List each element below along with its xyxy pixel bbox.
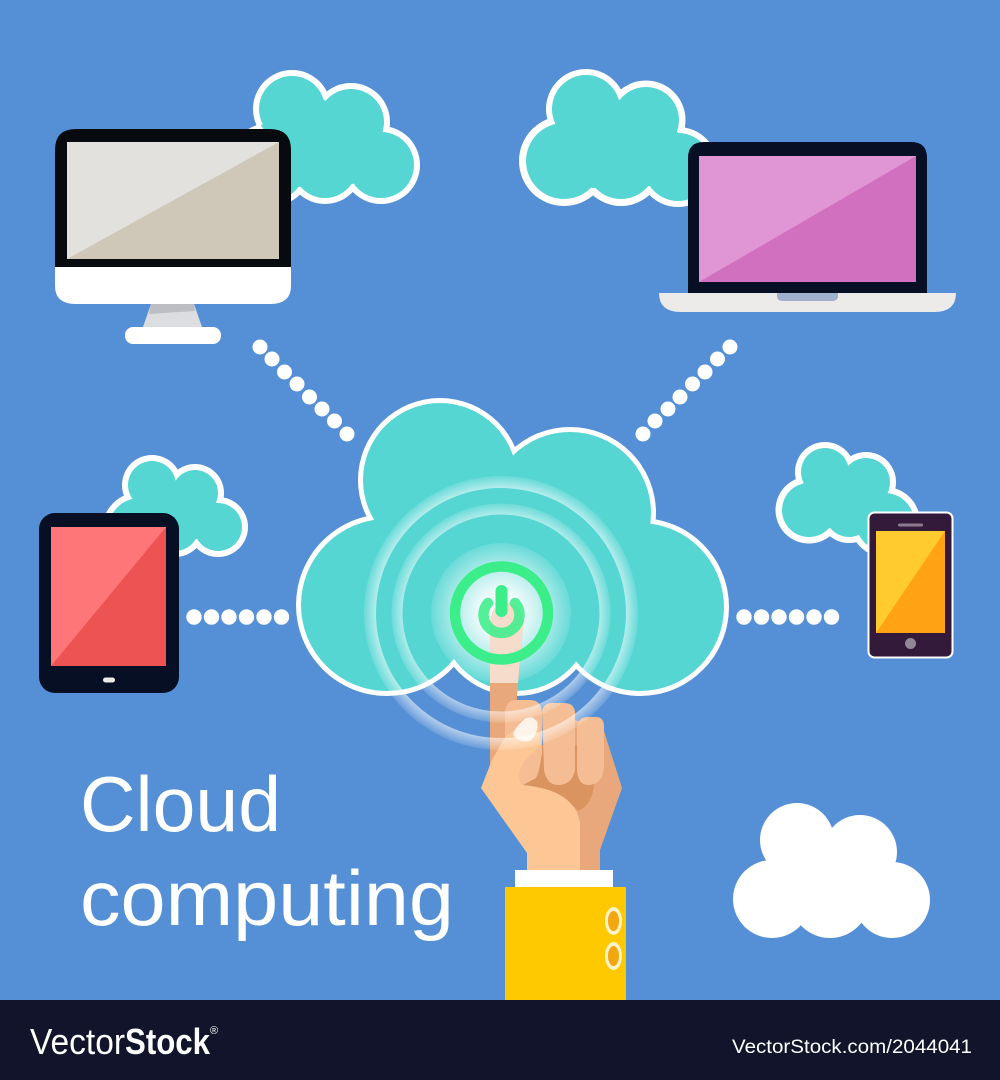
cloud behind tablet (102, 455, 248, 568)
title: Cloud (80, 760, 281, 848)
palm and thumb (481, 719, 580, 870)
shadow behind fingers (523, 745, 600, 811)
fingertip seen through the glow (490, 603, 523, 683)
cloud behind phone (776, 442, 920, 557)
index finger (490, 603, 523, 790)
desktop monitor (55, 129, 291, 344)
dotted connector: laptop (636, 340, 738, 442)
footer logo: VectorStock (30, 1021, 223, 1062)
plain white cloud (733, 803, 930, 938)
laptop (659, 142, 956, 312)
dotted connector: desktop (252, 340, 354, 442)
button glow disc (431, 543, 571, 683)
footer bar (0, 1000, 1000, 1080)
power button (455, 566, 548, 660)
touch ripple rings (370, 482, 632, 744)
central cloud (296, 398, 729, 696)
footer image id: VectorStock.com/2044041 (732, 1037, 972, 1058)
curled fingers (505, 700, 604, 785)
smartphone (868, 512, 952, 658)
hand pressing button (481, 603, 622, 870)
dotted connector: tablet (186, 609, 289, 625)
footer logo: ® (210, 1025, 218, 1037)
dotted connector: phone (736, 609, 839, 625)
title: computing (80, 854, 454, 942)
thumb highlight (513, 718, 537, 741)
tablet (39, 513, 179, 693)
back of hand (560, 716, 622, 870)
cloud behind desktop (228, 70, 420, 207)
cloud behind laptop (519, 69, 718, 207)
shirt cuff and jacket sleeve (505, 870, 626, 1000)
